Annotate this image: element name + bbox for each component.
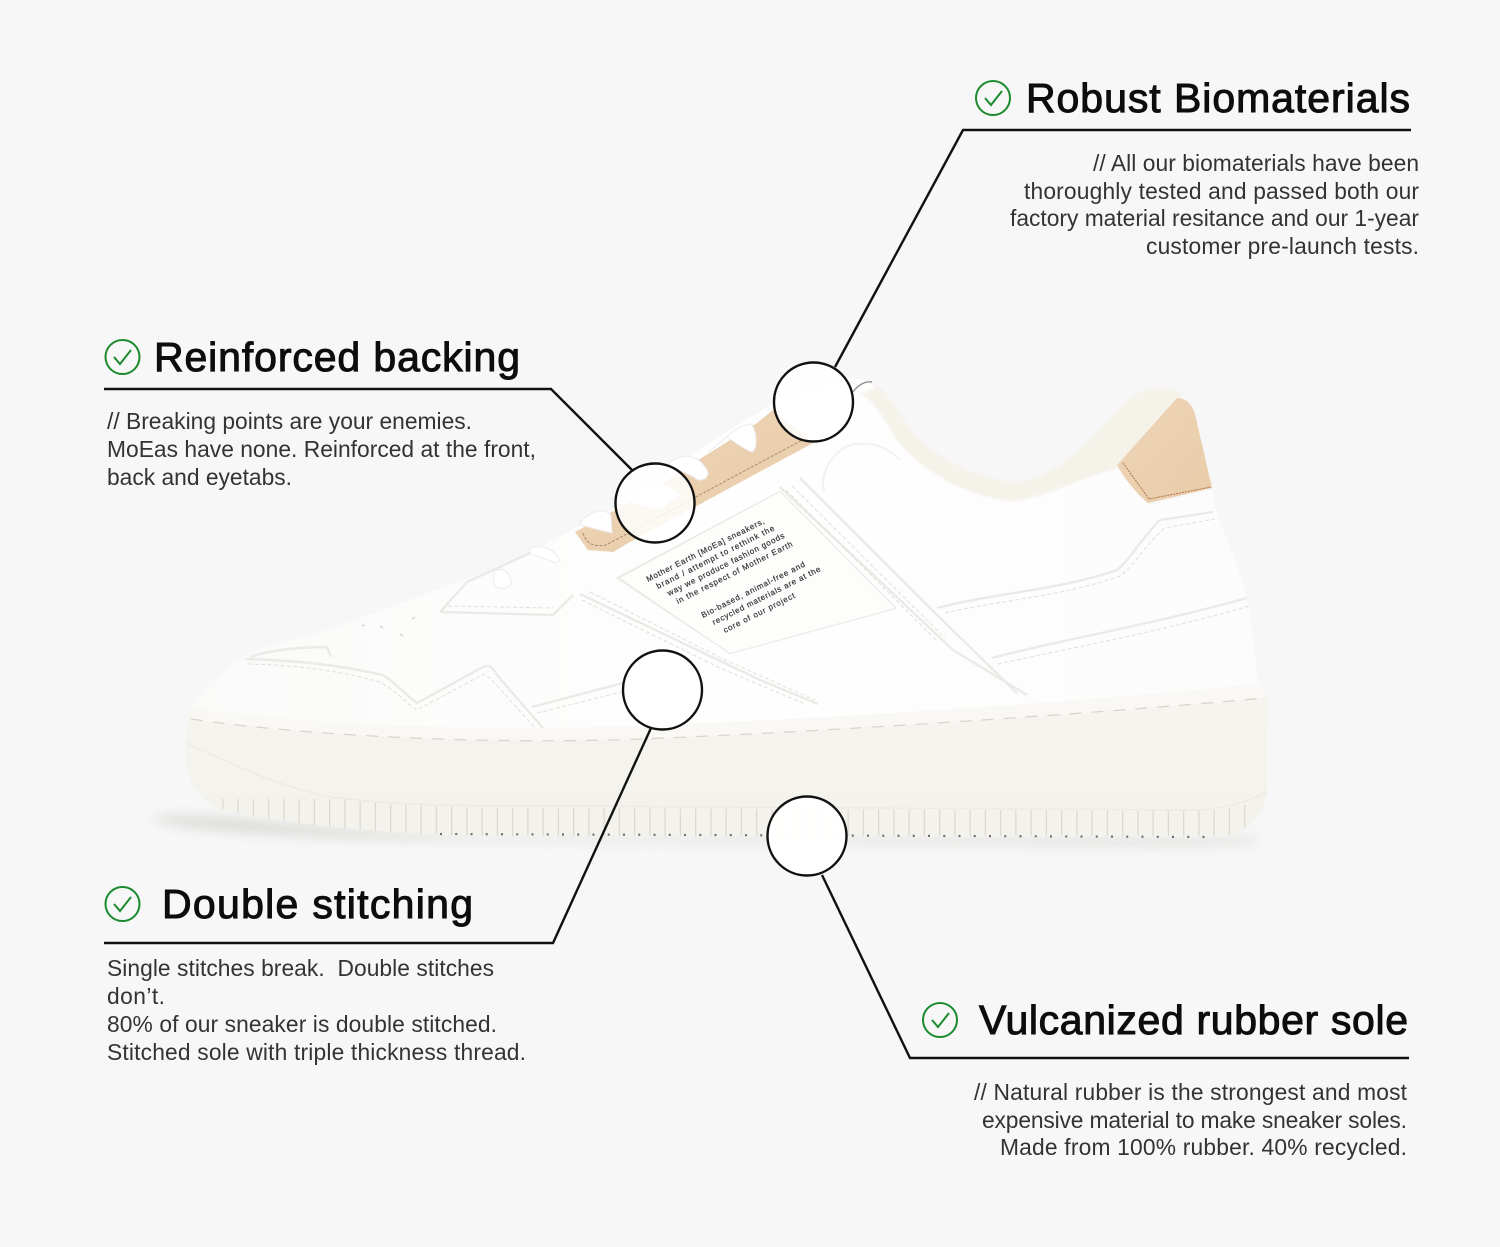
icon: green check <box>106 887 140 921</box>
care label text: way we produce fashion goods <box>665 531 786 598</box>
rubber sole <box>185 684 1267 837</box>
toe cap seams <box>245 617 625 728</box>
body text: don’t. <box>107 983 165 1009</box>
body text: Single stitches break. Double stitches <box>107 955 494 981</box>
care label text: core of our project <box>722 591 797 635</box>
heading: Vulcanized rubber sole <box>979 997 1408 1043</box>
body text: Made from 100% rubber. 40% recycled. <box>1000 1134 1407 1160</box>
marker: sole <box>768 796 846 876</box>
foxing rim <box>191 684 1266 741</box>
leader line <box>104 728 651 943</box>
care label text: recycled materials are at the <box>711 564 823 627</box>
leader line <box>822 875 1409 1058</box>
rear quarter panel seams <box>937 512 1249 664</box>
body text: MoEas have none. Reinforced at the front, <box>107 436 536 462</box>
side panel seams <box>440 444 1027 704</box>
white laces <box>494 424 756 588</box>
body text: // Breaking points are your enemies. <box>107 408 472 434</box>
callout: robust biomaterials <box>835 75 1419 367</box>
heading: Double stitching <box>162 881 473 927</box>
care label panel <box>620 492 895 653</box>
tread ridges <box>207 799 1246 836</box>
marker: stitching <box>623 650 702 730</box>
sneaker illustration <box>150 378 1267 845</box>
icon: green check <box>923 1003 957 1037</box>
sole crease <box>186 743 1266 810</box>
care label text: Mother Earth [MoEa] sneakers, <box>645 517 766 584</box>
marker: eyelet <box>774 362 853 442</box>
marker circles <box>616 362 853 876</box>
body text: back and eyetabs. <box>107 464 292 490</box>
leader line <box>104 389 632 470</box>
tread dots <box>440 834 1210 837</box>
heading: Reinforced backing <box>154 334 520 380</box>
body text: expensive material to make sneaker soles. <box>982 1107 1407 1133</box>
body text <box>107 955 526 1065</box>
body text: factory material resitance and our 1-year <box>1010 205 1419 231</box>
collar fur lining <box>860 386 1183 501</box>
marker: eyetab <box>616 464 694 542</box>
tan heel tab <box>1117 398 1212 503</box>
care label text: brand / attempt to rethink the <box>655 523 776 591</box>
icon: green check <box>976 81 1010 115</box>
body text <box>974 1079 1408 1160</box>
callout: reinforced backing <box>104 334 632 490</box>
icon: green check <box>106 340 140 374</box>
ground shadow <box>150 815 1261 845</box>
callout: vulcanized rubber sole <box>822 875 1409 1160</box>
body text: // All our biomaterials have been <box>1093 150 1419 176</box>
body text <box>107 408 536 490</box>
body text: customer pre-launch tests. <box>1146 233 1419 259</box>
body text <box>1010 150 1419 259</box>
foxing stripe <box>191 698 1264 741</box>
body text: 80% of our sneaker is double stitched. <box>107 1011 497 1037</box>
body text: Stitched sole with triple thickness thread. <box>107 1039 526 1065</box>
care label text: in the respect of Mother Earth <box>675 540 794 606</box>
care label text: Bio-based, animal-free and <box>700 560 807 620</box>
body text: thoroughly tested and passed both our <box>1024 178 1419 204</box>
body text: // Natural rubber is the strongest and most <box>974 1079 1408 1105</box>
heading: Robust Biomaterials <box>1026 75 1410 121</box>
leader line <box>835 130 1411 367</box>
tan eyestay <box>575 410 813 552</box>
inner collar loop <box>853 382 872 392</box>
callout: double stitching <box>104 728 651 1065</box>
care label text <box>645 517 823 635</box>
upper body <box>190 378 1262 745</box>
